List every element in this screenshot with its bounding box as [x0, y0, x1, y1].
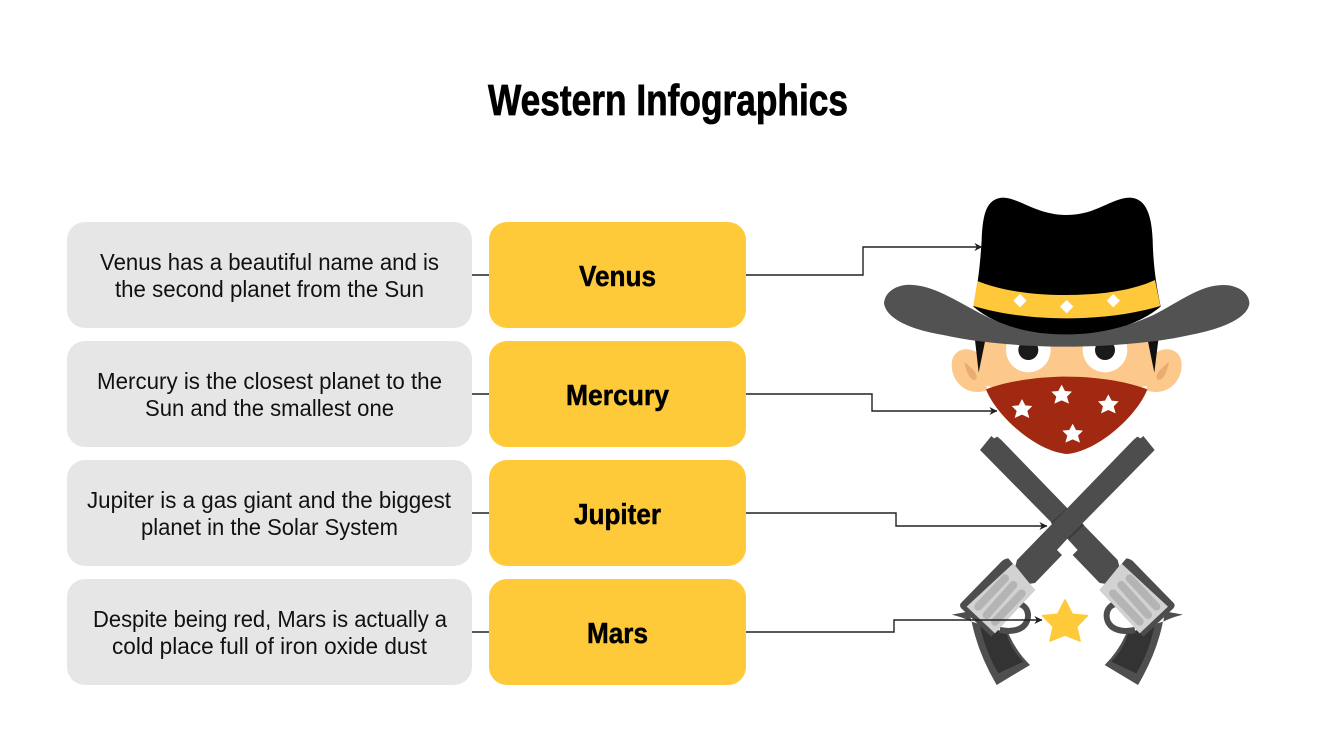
ears	[952, 349, 1182, 392]
icon: crossed revolvers	[952, 436, 1183, 685]
arrow: Venus to hat	[746, 247, 982, 275]
label box: Jupiter: Jupiter	[574, 499, 661, 531]
icon: cowboy head	[884, 198, 1249, 454]
icon: sheriff star	[1043, 600, 1087, 641]
description box: Mercury: Sun and the smallest one	[145, 395, 394, 421]
description box: Mercury: Mercury is the closest planet to the	[97, 368, 442, 394]
description box: Mars: Despite being red, Mars is actually a	[93, 606, 447, 632]
bandana	[986, 377, 1147, 454]
description box: Jupiter: Jupiter is a gas giant and the biggest	[87, 487, 452, 513]
label box: Mars	[489, 579, 746, 685]
label box: Mars: Mars	[587, 618, 648, 650]
eyes	[1006, 328, 1127, 372]
arrow: Mars to sheriff star	[746, 620, 1042, 632]
description box: Jupiter: planet in the Solar System	[141, 514, 398, 540]
row: Venus	[67, 222, 746, 328]
revolver pointing up-left	[980, 436, 1183, 685]
row: Jupiter	[67, 460, 746, 566]
description box: Jupiter	[67, 460, 472, 566]
description box: Venus: Venus has a beautiful name and is	[100, 249, 439, 275]
label box: Mercury: Mercury	[566, 380, 669, 412]
description box: Mercury	[67, 341, 472, 447]
face	[977, 337, 1157, 395]
description box: Venus: the second planet from the Sun	[115, 276, 424, 302]
hair	[975, 340, 1158, 373]
description box: Mars	[67, 579, 472, 685]
title: Western Infographics	[488, 76, 848, 125]
description box: Mars: cold place full of iron oxide dust	[112, 633, 428, 659]
label box: Mercury	[489, 341, 746, 447]
label box: Jupiter	[489, 460, 746, 566]
label box: Venus: Venus	[579, 261, 656, 293]
row: Mercury	[67, 341, 746, 447]
label box: Venus	[489, 222, 746, 328]
revolver pointing up-right	[952, 436, 1155, 685]
row: Mars	[67, 579, 746, 685]
arrow: Mercury to bandana	[746, 394, 997, 411]
hat	[884, 198, 1249, 347]
description box: Venus	[67, 222, 472, 328]
arrow: Jupiter to crossed revolvers	[746, 513, 1047, 526]
